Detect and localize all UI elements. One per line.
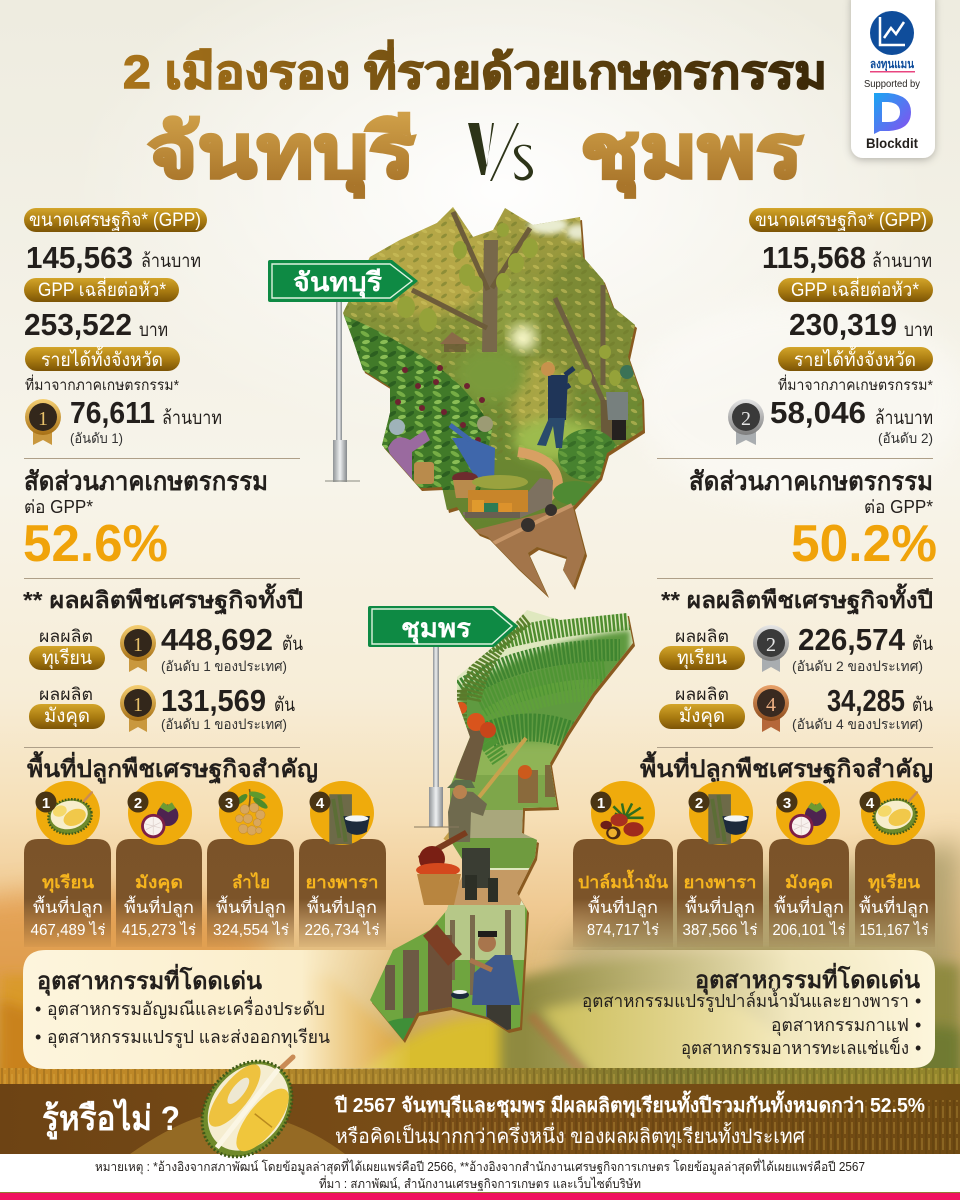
rubber section <box>370 905 527 1040</box>
panel: ชุมพร key industries <box>525 950 935 1068</box>
panel: ชุมพร key industries: • <box>915 1038 921 1058</box>
card: longan: ลำไย <box>232 872 270 892</box>
icon: gold medal 1 <box>25 399 61 445</box>
heading: agriculture share: สัดส่วนภาคเกษตรกรรม <box>689 466 933 496</box>
card: rubber: 226,734 ไร่ <box>304 921 380 939</box>
road sign: ชุมพร <box>368 606 518 828</box>
durian output row: 226,574 <box>798 622 906 657</box>
panel: จันทบุรี crop areas <box>24 750 386 947</box>
panel: ชุมพร crop output: ** ผลผลิตพืชเศรษฐกิจทั้งปี <box>661 583 933 615</box>
card: durian: 1 <box>42 795 50 812</box>
card: longan <box>207 781 294 947</box>
mangosteen output row: มังคุด <box>44 706 90 728</box>
mangosteen output row: มังคุด <box>679 706 725 728</box>
panel: จันทบุรี economy stats: (อันดับ 1) <box>70 430 123 446</box>
farmers right <box>548 375 568 420</box>
card: mangosteen: 206,101 ไร่ <box>772 921 846 939</box>
banner: did you know <box>0 1084 960 1154</box>
footer notes: ที่มา : สภาพัฒน์, สำนักงานเศรษฐกิจการเกษตร และเว็บไซต์บริษัท <box>319 1175 641 1191</box>
icon: ลงทุนแมน logo <box>870 11 914 55</box>
durian output row: (อันดับ 1 ของประเทศ) <box>161 658 287 674</box>
panel: จันทบุรี economy stats: 52.6% <box>23 515 168 573</box>
card: longan: 3 <box>225 795 233 812</box>
card: mangosteen: 2 <box>134 795 142 812</box>
card: durian: 467,489 ไร่ <box>30 921 106 939</box>
heading: ชุมพร: ชุมพร <box>580 110 803 198</box>
card: mangosteen: 3 <box>783 795 791 812</box>
panel: ชุมพร economy stats: ที่มาจากภาคเกษตรกรรม* <box>778 374 933 394</box>
durian output row: 448,692 <box>161 622 273 657</box>
panel: ชุมพร key industries: • <box>915 1015 921 1035</box>
card: mangosteen: มังคุด <box>785 873 833 893</box>
icon: gold medal 1: 1 <box>38 408 48 430</box>
pill: GPP: ขนาดเศรษฐกิจ* (GPP) <box>29 210 201 231</box>
card: rubber: พื้นที่ปลูก <box>307 895 377 918</box>
panel: จันทบุรี economy stats: บาท <box>139 320 168 341</box>
card: rubber <box>299 781 386 947</box>
mangosteen output row: 4 <box>766 694 776 716</box>
heading: agriculture share: สัดส่วนภาคเกษตรกรรม <box>24 466 268 496</box>
panel: ชุมพร key industries: อุตสาหกรรมที่โดดเด่น <box>695 962 921 996</box>
durian output row: ทุเรียน <box>42 647 92 670</box>
pill: GPP per capita: GPP เฉลี่ยต่อหัว* <box>38 276 167 301</box>
footer notes <box>0 1154 960 1192</box>
panel: ชุมพร economy stats: ล้านบาท <box>872 251 932 272</box>
card: oil palm: พื้นที่ปลูก <box>588 895 658 918</box>
panel: จันทบุรี key industries <box>23 950 410 1069</box>
mangosteen output row: 131,569 <box>161 683 266 718</box>
panel: จันทบุรี key industries: อุตสาหกรรมอัญมณีและเครื่องประดับ <box>47 996 325 1020</box>
card: mangosteen: 415,273 ไร่ <box>122 921 196 939</box>
logo card: Blockdit <box>866 136 918 151</box>
card: durian: 151,167 ไร่ <box>860 921 928 939</box>
panel: จันทบุรี economy stats <box>23 208 300 579</box>
card: durian: ทุเรียน <box>42 872 94 893</box>
mangosteen bush <box>343 315 492 490</box>
panel: ชุมพร crop output <box>657 583 933 748</box>
pill: province income: รายได้ทั้งจังหวัด <box>794 346 916 371</box>
durian output row: ตัน <box>282 634 303 655</box>
title: 2 เมืองรอง ที่รวยด้วยเกษตรกรรม <box>123 40 827 98</box>
card: longan: พื้นที่ปลูก <box>216 895 286 918</box>
durian output row: 2 <box>766 634 776 656</box>
durian output row: 1 <box>133 634 143 656</box>
card: durian: ทุเรียน <box>868 872 920 893</box>
card: rubber <box>677 781 763 947</box>
map illustration: จันทบุรี orchard <box>340 200 650 600</box>
card: rubber: ยางพารา <box>306 873 378 892</box>
road sign: จันทบุรี <box>268 260 418 482</box>
panel: จันทบุรี crop output: ** ผลผลิตพืชเศรษฐกิจทั้งปี <box>23 583 303 615</box>
panel: ชุมพร economy stats: ต่อ GPP* <box>864 497 933 517</box>
banner: did you know: ปี 2567 จันทบุรีและชุมพร มีผลผลิตทุเรียนทั้งปีรวมกันทั้งหมดกว่า 52.5% <box>334 1090 925 1118</box>
panel: จันทบุรี key industries: • <box>35 999 41 1019</box>
mangosteen output row: ตัน <box>274 695 295 716</box>
card: rubber: 2 <box>695 795 703 812</box>
panel: จันทบุรี key industries: • <box>35 1027 41 1047</box>
mangosteen output row: 34,285 <box>827 683 905 718</box>
card: rubber: 4 <box>316 795 325 812</box>
icon: silver medal 2 <box>728 399 764 445</box>
panel: จันทบุรี economy stats: 145,563 <box>26 240 133 275</box>
card: durian: พื้นที่ปลูก <box>33 895 103 918</box>
bottom pink bar <box>0 1193 960 1200</box>
card: mangosteen <box>116 781 202 947</box>
card: oil palm: 1 <box>597 795 605 812</box>
card: mangosteen: พื้นที่ปลูก <box>124 895 194 918</box>
panel: ชุมพร economy stats: 115,568 <box>762 240 866 275</box>
road sign: จันทบุรี: จันทบุรี <box>293 267 382 299</box>
truck <box>468 490 528 512</box>
mangosteen output row: ผลผลิต <box>39 685 93 704</box>
pill: province income: รายได้ทั้งจังหวัด <box>41 346 163 371</box>
panel: จันทบุรี economy stats: ล้านบาท <box>162 408 222 429</box>
durian output row: ทุเรียน <box>677 647 727 670</box>
panel: ชุมพร economy stats: ล้านบาท <box>875 408 933 429</box>
card: mangosteen <box>769 781 849 947</box>
road & earth <box>518 452 558 505</box>
card: oil palm: 874,717 ไร่ <box>587 921 659 939</box>
panel: ชุมพร economy stats: 58,046 <box>770 395 866 430</box>
palm farmer <box>416 738 526 905</box>
mangosteen output row: ผลผลิต <box>675 685 729 704</box>
panel: ชุมพร economy stats: 50.2% <box>791 515 937 573</box>
card: longan: 324,554 ไร่ <box>213 921 289 939</box>
mangosteen output row: (อันดับ 1 ของประเทศ) <box>161 716 287 732</box>
panel: จันทบุรี crop areas: พื้นที่ปลูกพืชเศรษฐกิจสำคัญ <box>27 750 318 785</box>
card: rubber: ยางพารา <box>684 873 756 892</box>
panel: จันทบุรี key industries: อุตสาหกรรมแปรรูป และส่งออกทุเรียน <box>47 1027 330 1048</box>
mangosteen output row: 1 <box>133 694 143 716</box>
mangosteen output row: (อันดับ 4 ของประเทศ) <box>792 716 923 732</box>
panel: จันทบุรี economy stats: ต่อ GPP* <box>24 497 93 517</box>
logo card: Supported by <box>864 78 921 90</box>
panel: ชุมพร key industries: อุตสาหกรรมกาแฟ <box>771 1015 909 1036</box>
card: oil palm <box>573 781 673 947</box>
panel: ชุมพร key industries: อุตสาหกรรมแปรรูปปาล์มน้ำมันและยางพารา <box>582 988 909 1012</box>
durian output row: ตัน <box>912 634 933 655</box>
panel: จันทบุรี economy stats: ที่มาจากภาคเกษตรกรรม* <box>25 374 179 394</box>
panel: จันทบุรี economy stats: 76,611 <box>70 395 155 430</box>
mangosteen output row <box>659 683 933 732</box>
card: durian: พื้นที่ปลูก <box>859 895 929 918</box>
footer notes: หมายเหตุ : *อ้างอิงจากสภาพัฒน์ โดยข้อมูลล่าสุดที่ได้เผยแพร่คือปี 2566, **อ้างอิงจากสำนักงานเศรษฐกิจการเกษตร โดยข้อมูลล่าสุดที่ได้เผยแพร่คือปี 2567 <box>95 1158 865 1175</box>
mangosteen output row <box>29 683 295 732</box>
icon: Blockdit logo <box>874 93 911 134</box>
panel: จันทบุรี crop output <box>23 583 303 748</box>
mangosteen output row: ตัน <box>912 695 933 716</box>
panel: ชุมพร economy stats: (อันดับ 2) <box>878 430 933 446</box>
pill: GPP per capita: GPP เฉลี่ยต่อหัว* <box>791 276 920 301</box>
card: oil palm: ปาล์มน้ำมัน <box>578 869 668 892</box>
banner: did you know: หรือคิดเป็นมากกว่าครึ่งหนึ่ง ของผลผลิตทุเรียนทั้งประเทศ <box>335 1122 805 1149</box>
panel: ชุมพร economy stats: บาท <box>904 320 933 341</box>
card: durian <box>24 781 111 947</box>
icon: silver medal 2: 2 <box>741 408 751 430</box>
panel: จันทบุรี key industries: อุตสาหกรรมที่โดดเด่น <box>37 963 263 997</box>
card: rubber: พื้นที่ปลูก <box>685 895 755 918</box>
title <box>123 40 827 198</box>
durian output row: (อันดับ 2 ของประเทศ) <box>792 658 923 674</box>
farmers left <box>388 430 430 482</box>
icon: durian over banner <box>183 1043 311 1175</box>
panel: ชุมพร crop areas <box>573 750 935 947</box>
road sign: ชุมพร: ชุมพร <box>401 613 471 645</box>
card: mangosteen: มังคุด <box>135 873 183 893</box>
panel: ชุมพร key industries: • <box>915 991 921 1011</box>
logo card: ลงทุนแมน <box>870 57 915 72</box>
card: durian <box>855 781 935 947</box>
heading: จันทบุรี: จันทบุรี <box>147 110 415 198</box>
panel: ชุมพร key industries: อุตสาหกรรมอาหารทะเลแช่แข็ง <box>681 1036 909 1059</box>
panel: ชุมพร crop areas: พื้นที่ปลูกพืชเศรษฐกิจสำคัญ <box>640 750 933 785</box>
pill: GPP: ขนาดเศรษฐกิจ* (GPP) <box>755 210 927 231</box>
banner: did you know: รู้หรือไม่ ? <box>42 1098 180 1140</box>
durian output row: ผลผลิต <box>675 627 729 646</box>
map illustration: ชุมพร plantation <box>370 610 635 1043</box>
card: rubber: 387,566 ไร่ <box>682 921 758 939</box>
durian output row <box>29 622 303 674</box>
durian output row <box>659 622 933 674</box>
panel: จันทบุรี economy stats: ล้านบาท <box>141 251 201 272</box>
panel: จันทบุรี economy stats: 253,522 <box>24 307 132 342</box>
icon: VS mark <box>468 123 533 181</box>
panel: ชุมพร economy stats <box>657 208 937 579</box>
card: mangosteen: พื้นที่ปลูก <box>774 895 844 918</box>
panel: ชุมพร economy stats: 230,319 <box>789 307 897 342</box>
card: durian: 4 <box>866 795 875 812</box>
durian output row: ผลผลิต <box>39 627 93 646</box>
logo card <box>851 0 935 158</box>
